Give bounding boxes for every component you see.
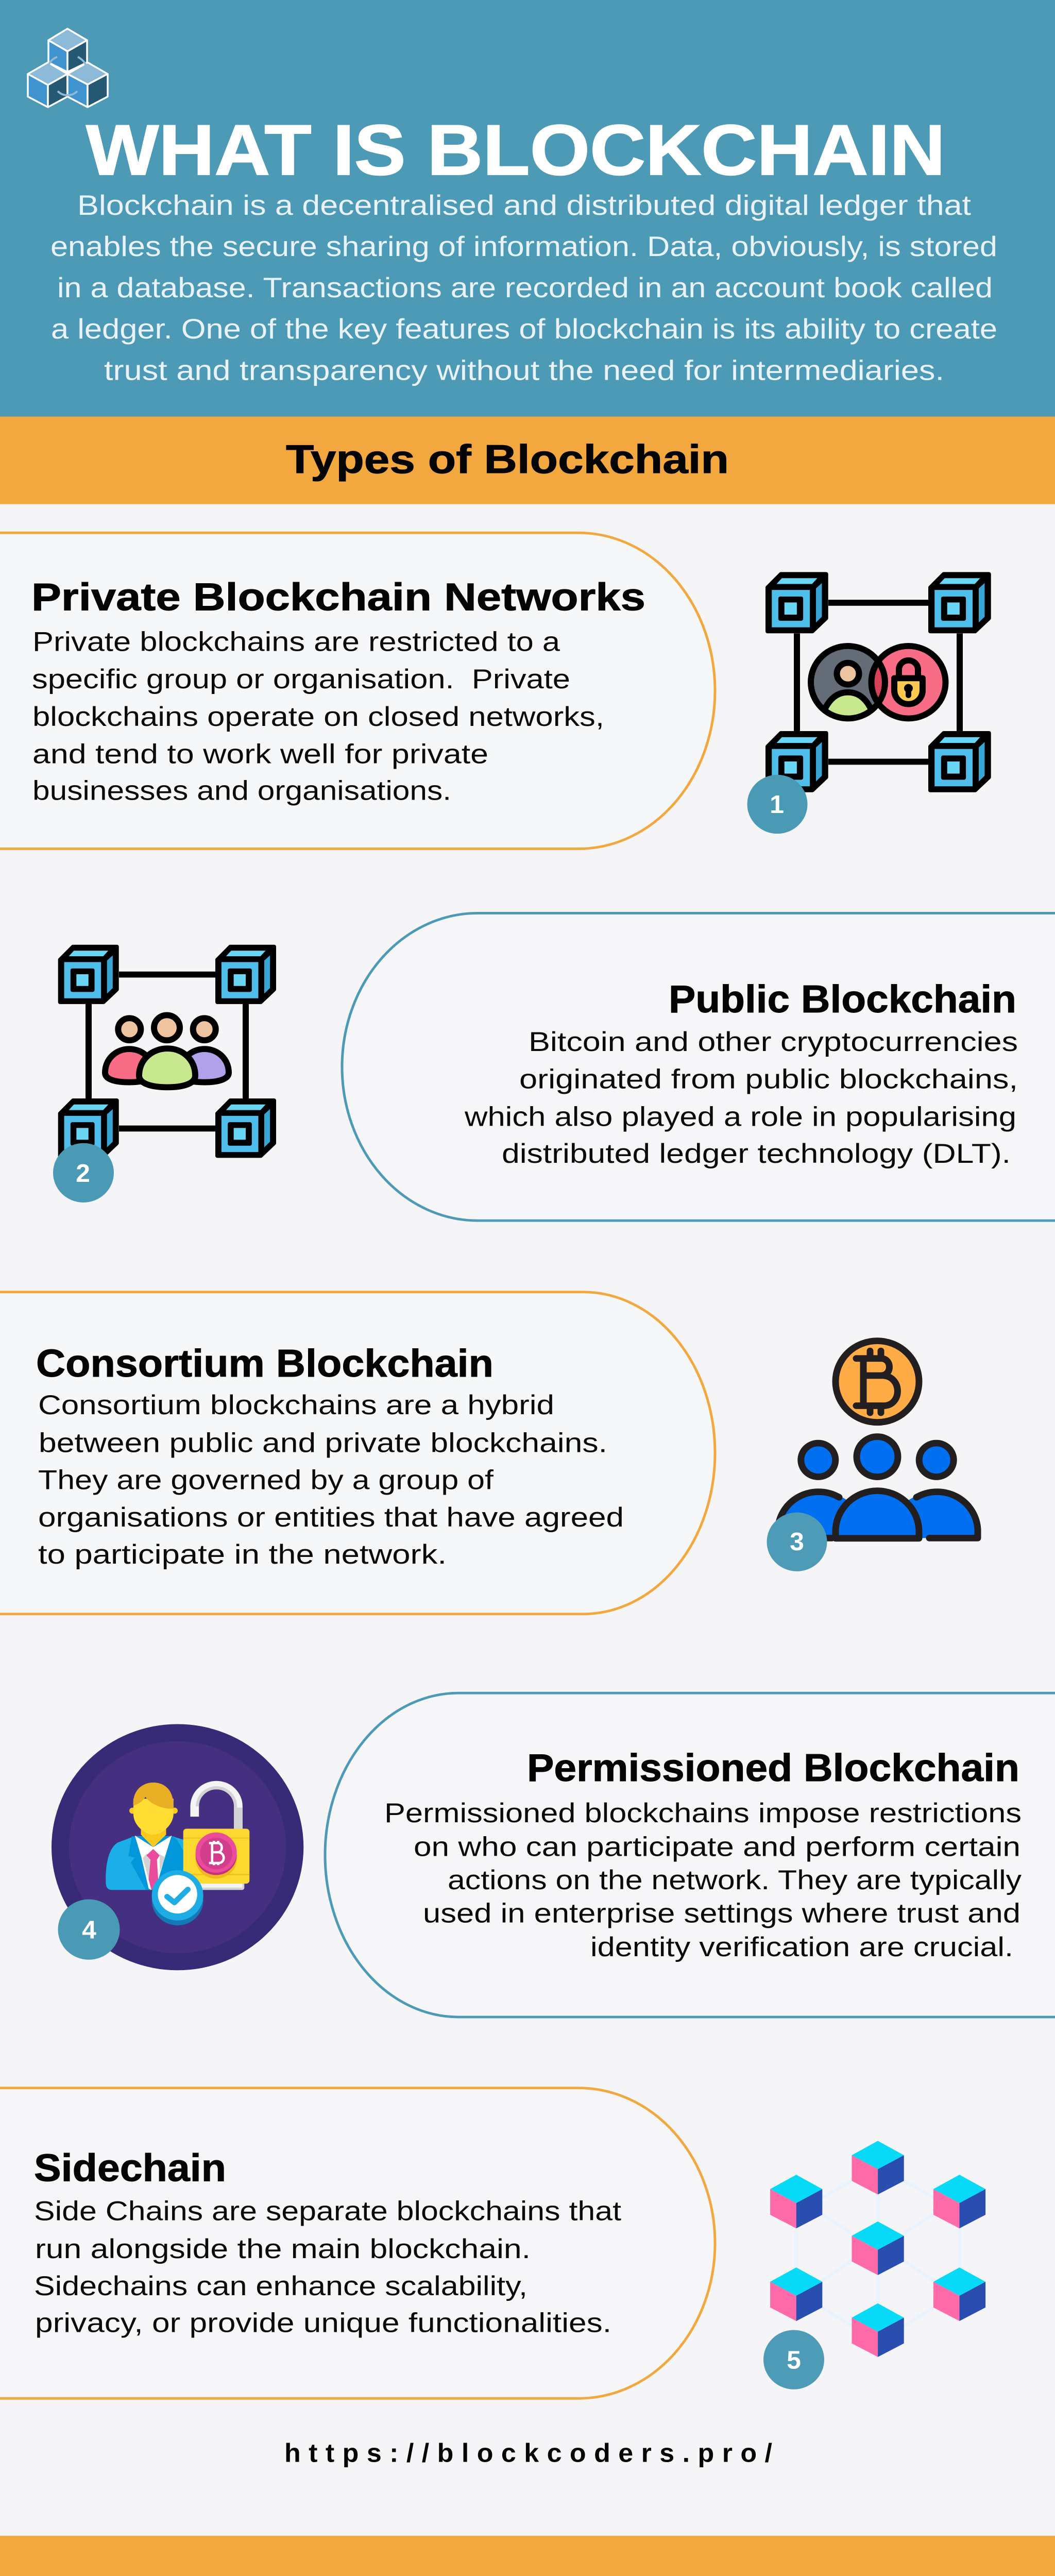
heading: private: Private Blockchain Networks [31,575,645,619]
body: consortium: to participate in the network. [38,1540,447,1570]
number badge 3 [767,1513,827,1571]
number badge 5: 5 [787,2346,801,2375]
body: consortium: between public and private blockchains. [39,1428,607,1458]
intro paragraph [50,190,997,386]
section heading: Types of Blockchain [286,436,729,482]
header panel [0,0,1055,418]
body: public: originated from public blockchains, [519,1064,1018,1094]
body: permissioned: on who can participate and perform certain [414,1832,1020,1862]
body: consortium: organisations or entities that have agreed [38,1502,624,1533]
body: sidechain: run alongside the main blockchain. [35,2234,531,2264]
icon: logo cubes [28,29,108,107]
body: private: Private blockchains are restricted to a [32,627,560,657]
number badge 2: 2 [76,1159,90,1188]
panel: private blockchain networks [0,533,715,849]
heading: sidechain: Sidechain [34,2146,226,2190]
intro paragraph: trust and transparency without the need for intermediaries. [104,354,944,386]
body: private: and tend to work well for private [32,739,488,769]
intro paragraph: a ledger. One of the key features of blockchain is its ability to create [51,313,997,345]
body: permissioned: actions on the network. They are typically [448,1866,1022,1895]
body: private: businesses and organisations. [32,776,451,806]
panel: permissioned blockchain [325,1693,1055,2017]
number badge 1 [747,775,808,834]
number badge 2 [53,1143,114,1202]
body: private: specific group or organisation. Private [32,664,570,694]
icon: permissioned identity and lock [52,1724,303,1970]
panel: sidechain [0,2088,715,2398]
number badge 3: 3 [790,1528,804,1556]
body: private [32,627,604,806]
body: sidechain: privacy, or provide unique functionalities. [35,2308,611,2338]
heading: public: Public Blockchain [669,978,1016,1021]
body: permissioned [384,1799,1022,1962]
body: permissioned: Permissioned blockchains impose restrictions [384,1799,1022,1828]
icon: public network [60,946,274,1156]
heading: consortium: Consortium Blockchain [36,1342,494,1385]
body: sidechain [34,2196,621,2338]
body: consortium: They are governed by a group of [38,1465,494,1495]
body: permissioned: identity verification are crucial. [590,1932,1013,1962]
body: public: which also played a role in popularising [464,1102,1016,1132]
body: consortium: Consortium blockchains are a hybrid [38,1391,554,1420]
icon: bitcoin community [778,1341,978,1538]
section banner: types of blockchain [0,417,1055,504]
intro paragraph: Blockchain is a decentralised and distributed digital ledger that [77,190,971,221]
body: permissioned: used in enterprise settings where trust and [423,1899,1020,1928]
footer band [0,2536,1055,2576]
body: public: distributed ledger technology (DLT). [502,1139,1011,1169]
body: private: blockchains operate on closed networks, [32,702,604,732]
icon: sidechain cubes network [770,2141,985,2357]
number badge 5 [763,2330,824,2389]
panel: public blockchain [342,913,1055,1221]
body: public: Bitcoin and other cryptocurrencies [529,1027,1018,1057]
body: sidechain: Sidechains can enhance scalability, [34,2272,528,2301]
panel: consortium blockchain [0,1292,715,1614]
intro paragraph: enables the secure sharing of information. Data, obviously, is stored [50,231,997,262]
intro paragraph: in a database. Transactions are recorded in an account book called [57,272,993,303]
icon: private network [768,574,989,790]
website link: https://blockcoders.pro/ [284,2438,772,2467]
number badge 4 [58,1900,120,1960]
number badge 4: 4 [82,1916,96,1944]
number badge 1: 1 [770,791,784,819]
heading: permissioned: Permissioned Blockchain [527,1747,1019,1790]
title: WHAT IS BLOCKCHAIN [86,110,945,190]
body: sidechain: Side Chains are separate blockchains that [34,2196,621,2226]
body: public [464,1027,1018,1169]
body: consortium [38,1391,624,1570]
